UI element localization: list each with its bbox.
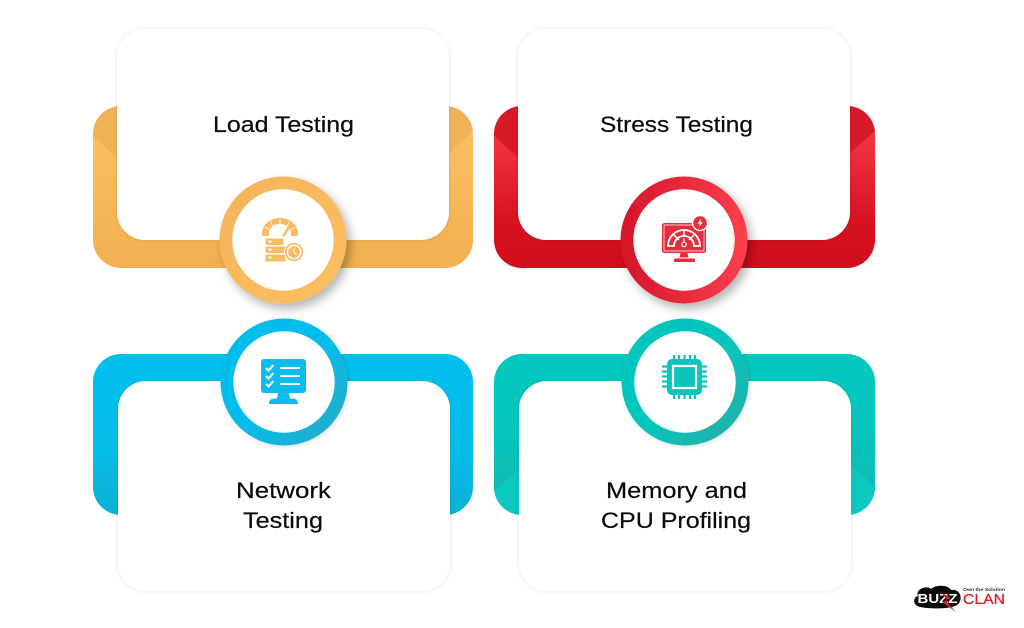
logo tagline: Own the Solution: [963, 587, 1005, 592]
heading: network testing: Network: [236, 478, 332, 503]
heading: load testing: Load Testing: [213, 112, 354, 137]
icon: cpu chip: [662, 355, 707, 399]
icon ring: [220, 176, 346, 304]
blue band: [93, 354, 473, 515]
logo: buzzclan: [914, 586, 1005, 612]
logo wordmark buzz: BUZZ: [918, 591, 958, 606]
heading: stress testing: Stress Testing: [600, 112, 753, 137]
white card: [519, 381, 851, 591]
icon: monitor with speedometer: [662, 215, 708, 262]
white card: [117, 29, 449, 240]
red band: [494, 106, 875, 268]
icon ring: [622, 318, 748, 446]
orange band: [93, 106, 473, 268]
heading: memory and cpu profiling: [601, 478, 751, 533]
white card: [118, 381, 450, 591]
panel: stress testing: [494, 29, 875, 304]
icon: gauge and server with clock: [262, 218, 304, 262]
logo wordmark clan: CLAN: [963, 591, 1005, 608]
panel: network testing: [93, 318, 473, 591]
logo cloud: [914, 586, 961, 608]
icon ring: [220, 318, 348, 446]
white card: [518, 29, 850, 240]
teal band: [494, 354, 875, 515]
heading: memory and cpu profiling: Memory and: [606, 478, 747, 503]
icon: monitor with checklist: [261, 359, 306, 404]
panel: load testing: [93, 29, 473, 304]
heading: network testing: Testing: [243, 508, 323, 533]
panel: memory and cpu profiling: [494, 318, 875, 591]
logo lightning bolt: [941, 592, 956, 612]
heading: memory and cpu profiling: CPU Profiling: [601, 508, 751, 533]
heading: network testing: [236, 478, 332, 533]
icon ring: [620, 176, 748, 304]
